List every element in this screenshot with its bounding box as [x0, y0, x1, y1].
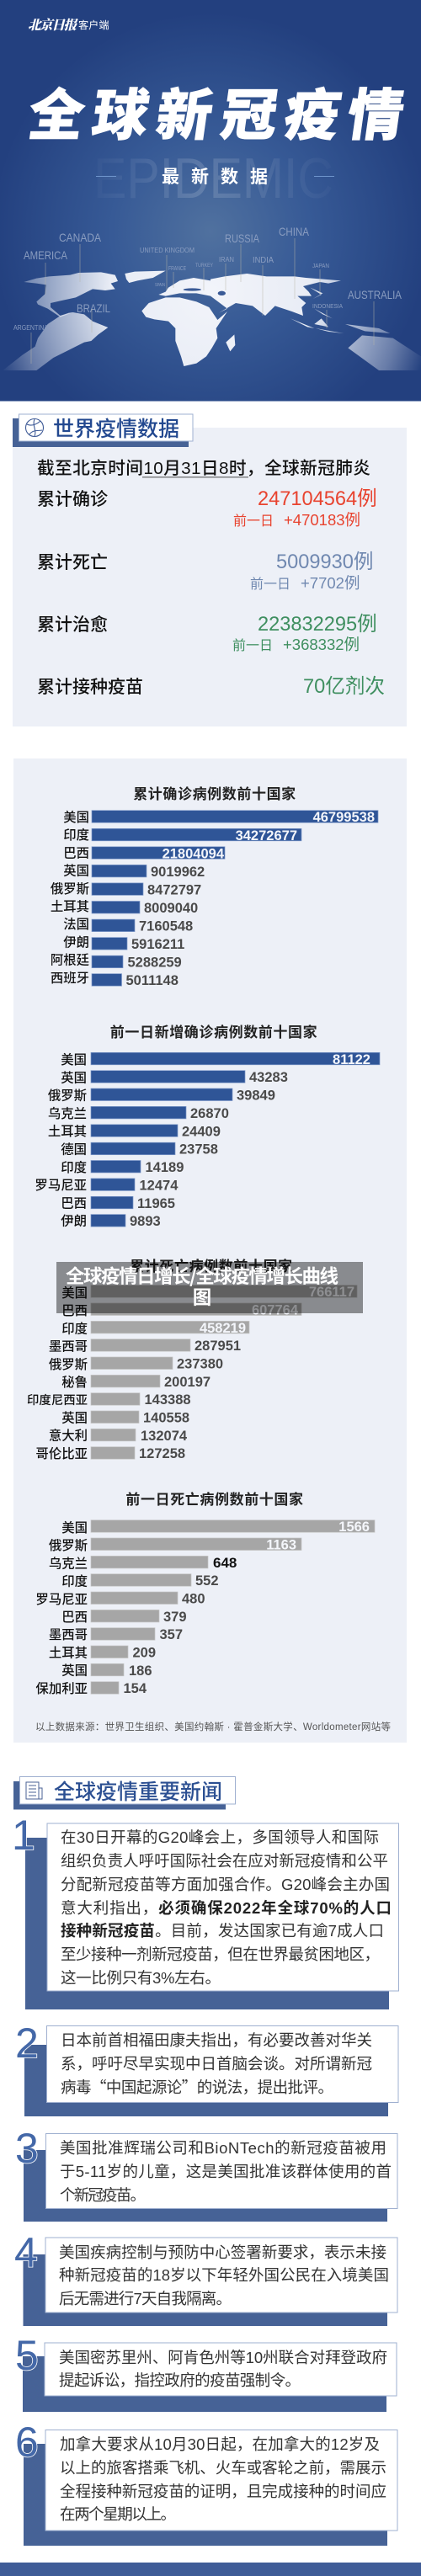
chart: daily deaths top ten: 前一日死亡病例数前十国家 [125, 1488, 304, 1509]
panel: charts [13, 758, 407, 1743]
stat: confirmed: 前一日 [233, 514, 274, 529]
chart: cumulative confirmed top ten: 美国 [63, 807, 89, 826]
chart: daily deaths top ten: 648 [213, 1555, 237, 1571]
chart: cumulative confirmed top ten: 土耳其 [51, 897, 89, 915]
chart: cumulative deaths top ten: 132074 [141, 1429, 188, 1444]
chart: daily new confirmed top ten: 23758 [179, 1142, 218, 1158]
chart: daily deaths top ten: 1163 [266, 1537, 296, 1552]
section heading: world data [13, 412, 193, 447]
chart: daily new confirmed top ten: 24409 [182, 1124, 221, 1139]
chart: daily deaths top ten: 154 [123, 1681, 147, 1696]
news item 5 [15, 2332, 397, 2412]
stat: confirmed: +470183例 [284, 511, 360, 529]
chart: daily deaths top ten: 552 [195, 1573, 219, 1589]
chart: cumulative confirmed top ten: 巴西 [63, 843, 89, 861]
footer band [0, 2563, 421, 2576]
map country labels: AMERICA [24, 248, 68, 262]
news item 3 [15, 2125, 397, 2222]
news item 3: 3 [15, 2125, 39, 2172]
chart: cumulative deaths top ten: 143388 [145, 1392, 191, 1408]
stat: recovered: +368332例 [283, 636, 360, 653]
chart: cumulative deaths top ten: 607764 [252, 1303, 299, 1318]
chart: daily new confirmed top ten: 39849 [237, 1088, 275, 1103]
news item 3: 个新冠疫苗。 [60, 2186, 146, 2204]
chart: cumulative confirmed top ten: 俄罗斯 [51, 879, 89, 897]
chart: daily new confirmed top ten: 土耳其 [48, 1121, 87, 1140]
chart: daily new confirmed top ten: 罗马尼亚 [35, 1175, 87, 1194]
chart: daily new confirmed top ten [35, 1020, 380, 1230]
chart: cumulative deaths top ten: 印度 [61, 1318, 88, 1337]
chart: cumulative deaths top ten: 墨西哥 [49, 1337, 88, 1355]
main title: 全球新冠疫情 [24, 71, 410, 152]
news item 2: 系，呼吁尽早实现中日首脑会谈。对所谓新冠 [61, 2055, 372, 2073]
chart: daily new confirmed top ten: 俄罗斯 [48, 1086, 87, 1104]
chart: daily deaths top ten: 209 [133, 1645, 156, 1660]
chart: cumulative confirmed top ten: 印度 [63, 825, 89, 844]
stat: vaccine doses: 累计接种疫苗 [37, 678, 143, 697]
news item 3: 于5-11岁的儿童，这是美国批准该群体使用的首 [60, 2163, 392, 2180]
subtitle: 最新数据 [162, 163, 268, 189]
chart: daily new confirmed top ten: 81122 [333, 1052, 370, 1067]
overlay caption: 图 [193, 1283, 211, 1310]
ghost word EPIDEMIC: EPIDEMIC [93, 146, 333, 210]
stat: deaths [37, 551, 373, 592]
chart: daily new confirmed top ten: 14189 [145, 1160, 184, 1175]
chart: cumulative confirmed top ten: 阿根廷 [51, 950, 89, 969]
chart: cumulative confirmed top ten: 5288259 [128, 955, 182, 971]
news item 1 [12, 1812, 399, 2009]
chart: cumulative confirmed top ten: 34272677 [236, 828, 297, 844]
chart: daily deaths top ten: 美国 [61, 1518, 88, 1536]
news item 1: 至少接种一剂新冠疫苗，但在世界最贫困地区， [61, 1945, 380, 1963]
stat: confirmed: 247104564例 [258, 487, 377, 510]
intro line: 截至北京时间10月31日8时，全球新冠肺炎 [37, 459, 370, 478]
data source note: 以上数据来源：世界卫生组织、美国约翰斯 · 霍普金斯大学、Worldometer网站等 [35, 1721, 391, 1732]
chart: cumulative confirmed top ten: 9019962 [151, 865, 205, 880]
map country labels: JAPAN [312, 263, 329, 269]
section heading: global news [13, 1775, 236, 1810]
map country labels: UNITED KINGDOM [140, 246, 195, 254]
chart: daily deaths top ten: 印度 [61, 1572, 88, 1590]
chart: cumulative deaths top ten: 766117 [309, 1285, 354, 1300]
chart: daily deaths top ten: 乌克兰 [49, 1553, 88, 1572]
chart: daily deaths top ten: 保加利亚 [35, 1679, 88, 1697]
chart: daily new confirmed top ten: 美国 [61, 1050, 87, 1068]
news item 4: 后无需进行7天自我隔离。 [59, 2290, 232, 2307]
news item 6 [15, 2419, 397, 2546]
chart: daily new confirmed top ten: 26870 [190, 1106, 229, 1121]
chart: cumulative confirmed top ten: 46799538 [313, 810, 375, 825]
chart: cumulative deaths top ten: 累计死亡病例数前十国家 [130, 1254, 293, 1275]
stat: recovered: 223832295例 [258, 613, 377, 636]
publisher logo: 客户端 [78, 17, 109, 32]
map leader lines [31, 238, 374, 364]
map country labels: CANADA [59, 231, 102, 244]
map country labels: FRANCE [168, 266, 186, 272]
stat: deaths: 前一日 [250, 577, 290, 592]
map country labels: CHINA [279, 225, 310, 238]
chart: daily new confirmed top ten: 英国 [61, 1067, 87, 1086]
icon: newspaper [26, 1782, 42, 1799]
news item 2 [15, 2020, 398, 2116]
chart: daily deaths top ten: 1566 [338, 1520, 370, 1535]
map country labels: INDIA [253, 256, 274, 265]
chart: daily new confirmed top ten: 11965 [137, 1196, 175, 1211]
world map [3, 271, 421, 370]
chart: daily deaths top ten: 379 [163, 1610, 187, 1625]
stat: deaths: +7702例 [301, 574, 360, 592]
stat: deaths: 5009930例 [276, 551, 373, 573]
chart: cumulative confirmed top ten [51, 782, 378, 988]
map country labels: TURKEY [195, 263, 213, 269]
hero banner [0, 0, 421, 402]
chart: cumulative confirmed top ten: 5916211 [131, 937, 184, 952]
section heading: world data: 世界疫情数据 [53, 412, 179, 443]
chart: cumulative deaths top ten: 俄罗斯 [49, 1355, 88, 1373]
chart: daily deaths top ten: 480 [182, 1591, 205, 1606]
chart: daily new confirmed top ten: 9893 [130, 1214, 161, 1229]
chart: cumulative confirmed top ten: 5011148 [126, 973, 179, 988]
chart: cumulative deaths top ten: 127258 [139, 1446, 185, 1461]
chart: cumulative deaths top ten: 秘鲁 [61, 1372, 88, 1391]
chart: daily deaths top ten: 俄罗斯 [49, 1535, 88, 1554]
chart: cumulative confirmed top ten: 英国 [63, 861, 89, 880]
stat: recovered: 累计治愈 [37, 615, 108, 635]
section heading: global news: 全球疫情重要新闻 [54, 1775, 222, 1806]
chart: daily deaths top ten: 巴西 [61, 1607, 88, 1626]
stat: recovered [37, 613, 377, 653]
news item 5: 提起诉讼，指控政府的疫苗强制令。 [59, 2371, 301, 2389]
overlay caption: 全球疫情日增长/全球疫情增长曲线 [66, 1262, 338, 1289]
news item 4: 种新冠疫苗的18岁以下年轻外国公民在入境美国 [59, 2266, 389, 2284]
chart: daily new confirmed top ten: 印度 [61, 1158, 87, 1176]
stat: confirmed: 累计确诊 [37, 490, 108, 509]
news item 6: 加拿大要求从10月30日起，在加拿大的12岁及 [60, 2435, 380, 2453]
news item 6: 在两个星期以上。 [60, 2505, 176, 2523]
map country labels: AUSTRALIA [348, 289, 402, 301]
news item 4: 4 [14, 2229, 38, 2276]
chart: daily new confirmed top ten: 乌克兰 [48, 1104, 87, 1122]
stat: vaccine doses: 70亿剂次 [303, 675, 385, 698]
chart: daily new confirmed top ten: 12474 [140, 1178, 179, 1193]
overlay caption [56, 1262, 363, 1313]
chart: cumulative confirmed top ten: 累计确诊病例数前十国家 [133, 782, 296, 803]
chart: daily new confirmed top ten: 德国 [61, 1140, 87, 1158]
chart: daily new confirmed top ten: 43283 [249, 1070, 288, 1085]
news item 1: 接种新冠疫苗。目前，发达国家已有逾7成人口 [61, 1922, 384, 1940]
chart: daily deaths top ten [35, 1488, 375, 1697]
news item 2: 2 [15, 2020, 39, 2067]
news item 1: 分配新冠疫苗等方面加强合作。G20峰会主办国 [61, 1876, 390, 1893]
chart: daily deaths top ten: 土耳其 [49, 1642, 88, 1661]
chart: daily deaths top ten: 英国 [61, 1661, 88, 1679]
chart: daily deaths top ten: 357 [160, 1627, 183, 1642]
news item 1: 意大利指出，必须确保2022年全球70%的人口 [61, 1899, 392, 1917]
chart: cumulative confirmed top ten: 8009040 [144, 901, 198, 916]
icon: globe [25, 419, 44, 436]
map country labels: INDONESIA [312, 302, 343, 310]
chart: cumulative confirmed top ten: 21804094 [163, 846, 225, 861]
chart: daily new confirmed top ten: 伊朗 [61, 1211, 87, 1230]
map country labels: BRAZIL [77, 301, 110, 315]
news item 1: 1 [12, 1812, 35, 1859]
chart: cumulative deaths top ten: 237380 [177, 1357, 223, 1372]
news item 6: 以上的旅客搭乘飞机、火车或客轮之前，需展示 [60, 2459, 386, 2477]
news item 4 [14, 2229, 397, 2326]
chart: cumulative deaths top ten: 意大利 [49, 1426, 88, 1445]
stat: vaccine doses [37, 675, 385, 698]
chart: cumulative deaths top ten: 140558 [143, 1411, 189, 1426]
panel: world epidemic data [13, 412, 407, 726]
news item 2: 日本前首相福田康夫指出，有必要改善对华关 [61, 2031, 372, 2049]
chart: cumulative confirmed top ten: 法国 [63, 914, 89, 933]
stat: confirmed [37, 487, 377, 529]
chart: cumulative deaths top ten: 巴西 [61, 1301, 88, 1319]
chart: cumulative deaths top ten: 印度尼西亚 [27, 1391, 88, 1408]
news item 1: 在30日开幕的G20峰会上，多国领导人和国际 [61, 1828, 379, 1846]
news item 5: 5 [15, 2332, 39, 2379]
chart: daily deaths top ten: 罗马尼亚 [35, 1589, 88, 1608]
news item 6: 全程接种新冠疫苗的证明，且完成接种的时间应 [60, 2483, 386, 2500]
chart: daily new confirmed top ten: 巴西 [61, 1193, 87, 1211]
news item 4: 美国疾病控制与预防中心签署新要求，表示未接 [59, 2243, 386, 2261]
map country labels: IRAN [219, 255, 234, 263]
news item 1: 组织负责人呼吁国际社会在应对新冠疫情和公平 [61, 1852, 388, 1870]
publisher logo [28, 15, 109, 34]
chart: cumulative deaths top ten: 287951 [195, 1339, 241, 1354]
news item 3: 美国批准辉瑞公司和BioNTech的新冠疫苗被用 [60, 2139, 386, 2157]
news item 1: 这一比例只有3%左右。 [61, 1969, 221, 1987]
chart: daily new confirmed top ten: 前一日新增确诊病例数前十国家 [110, 1020, 317, 1041]
news item 2: 病毒“中国起源论”的说法，提出批评。 [61, 2076, 333, 2098]
chart: cumulative confirmed top ten: 伊朗 [63, 932, 89, 950]
publisher logo: 北京日报 [28, 15, 78, 34]
map country labels: SPAIN [155, 283, 165, 288]
chart: daily deaths top ten: 186 [129, 1663, 152, 1679]
news item 6: 6 [15, 2419, 39, 2466]
chart: cumulative deaths top ten: 哥伦比亚 [35, 1444, 88, 1462]
chart: cumulative deaths top ten: 英国 [61, 1408, 88, 1426]
chart: cumulative confirmed top ten: 7160548 [139, 919, 193, 934]
stat: recovered: 前一日 [232, 638, 273, 653]
chart: cumulative confirmed top ten: 8472797 [147, 882, 201, 897]
chart: daily deaths top ten: 墨西哥 [49, 1625, 88, 1643]
chart: cumulative deaths top ten [27, 1254, 357, 1462]
map country labels: ARGENTINA [13, 324, 49, 332]
stat: deaths: 累计死亡 [37, 553, 108, 572]
map country labels: RUSSIA [225, 232, 260, 245]
map country labels [13, 225, 402, 332]
chart: cumulative deaths top ten: 200197 [164, 1375, 210, 1390]
chart: cumulative confirmed top ten: 西班牙 [51, 968, 89, 987]
chart: cumulative deaths top ten: 美国 [61, 1283, 88, 1301]
chart: cumulative deaths top ten: 458219 [200, 1321, 246, 1336]
news item 5: 美国密苏里州、阿肯色州等10州联合对拜登政府 [59, 2349, 387, 2366]
